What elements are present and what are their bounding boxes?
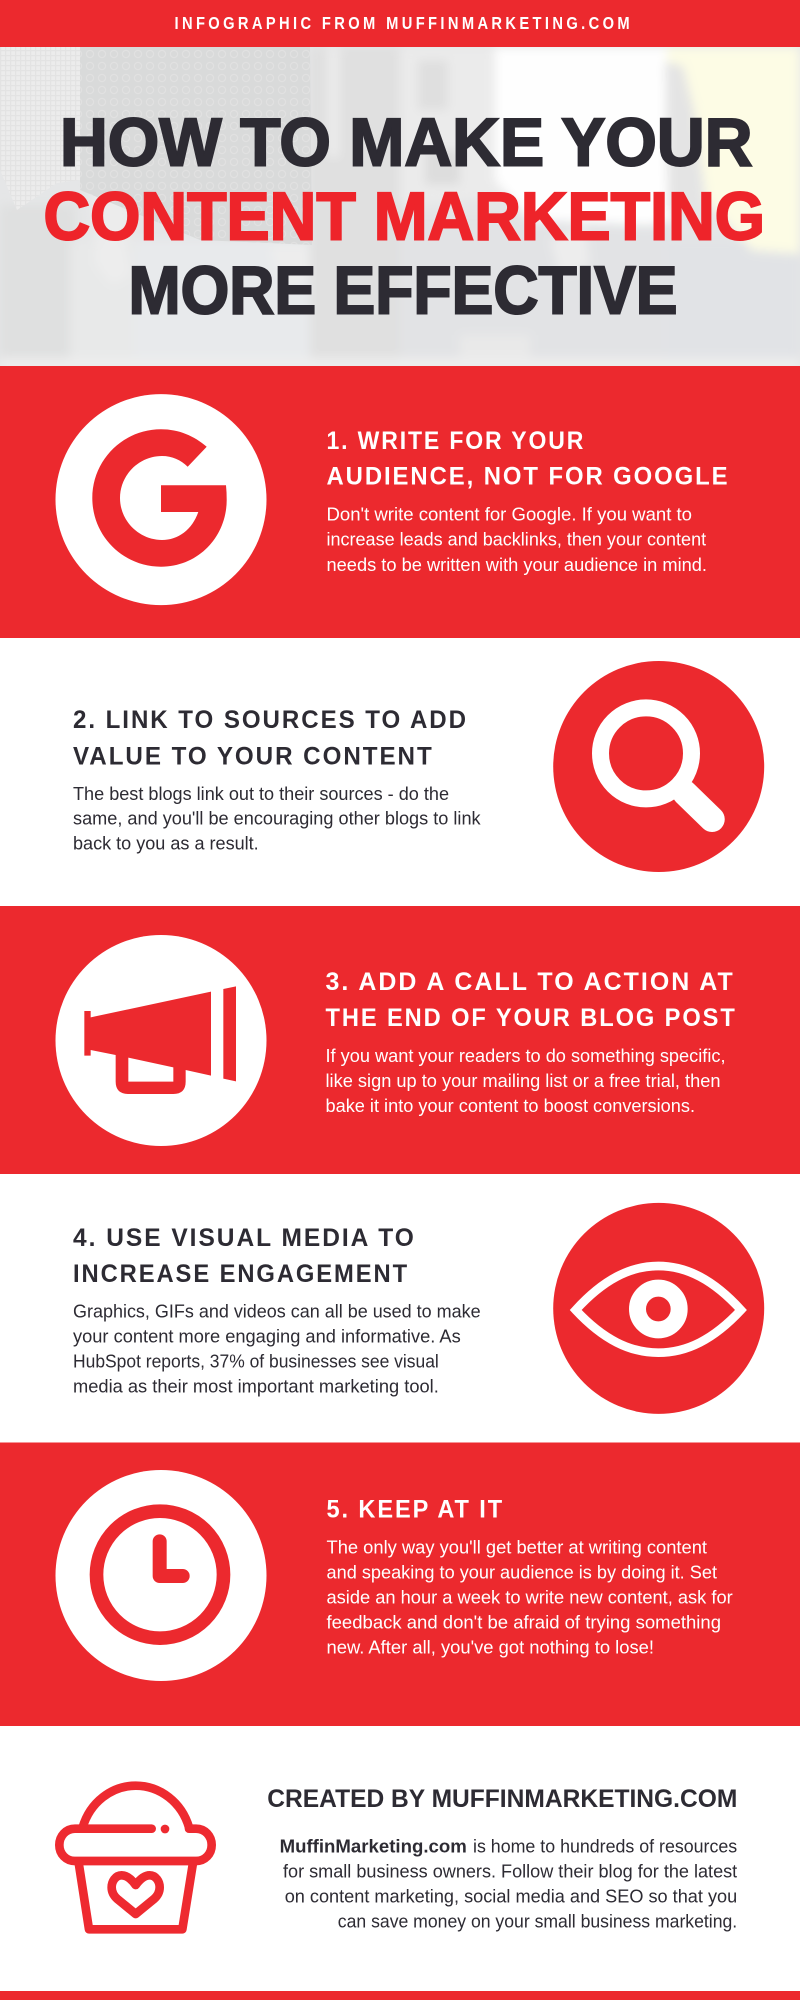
footer body text: for small business owners. Follow their blog for the latest — [283, 1860, 738, 1882]
body text 1 — [326, 504, 707, 575]
heading 3 — [326, 969, 737, 1032]
body text 4: Graphics, GIFs and videos can all be used to make — [73, 1301, 481, 1322]
footer body text: on content marketing, social media and SEO so that you — [285, 1886, 737, 1906]
heading 3: 3. ADD A CALL TO ACTION AT — [326, 969, 735, 996]
heading 5: 5. KEEP AT IT — [326, 1496, 504, 1524]
title: CONTENT MARKETING — [44, 178, 765, 254]
top banner — [0, 0, 800, 47]
body text 3: If you want your readers to do something specific, — [326, 1045, 726, 1066]
body text 5 — [326, 1537, 733, 1658]
panel: 3 add a call to action — [0, 906, 800, 1174]
footer body text: is home to hundreds of resources — [473, 1836, 737, 1856]
heading 2 — [73, 707, 468, 770]
body text 3 — [326, 1045, 726, 1116]
footer heading: CREATED BY MUFFINMARKETING.COM — [267, 1786, 737, 1813]
body text 3: like sign up to your mailing list or a free trial, then — [326, 1070, 720, 1091]
icon: magnifying glass — [553, 661, 764, 872]
hero panel: faded photo background with title — [0, 47, 800, 370]
body text 5: aside an hour a week to write new content, ask for — [326, 1587, 733, 1608]
body text 5: new. After all, you've got nothing to lose! — [326, 1637, 654, 1658]
heading 4: INCREASE ENGAGEMENT — [73, 1261, 409, 1288]
icon: megaphone — [56, 935, 266, 1146]
body text 5: and speaking to your audience is by doing it. Set — [326, 1562, 718, 1583]
body text 1: Don't write content for Google. If you want to — [326, 504, 692, 524]
body text 4: media as their most important marketing tool. — [73, 1375, 439, 1396]
footer body text: MuffinMarketing.com — [280, 1836, 467, 1856]
body text 4: HubSpot reports, 37% of businesses see visual — [73, 1351, 439, 1372]
body text 2 — [73, 783, 481, 854]
panel: 2 link to sources — [0, 638, 800, 906]
icon: google G — [56, 394, 266, 605]
heading 2: VALUE TO YOUR CONTENT — [73, 743, 434, 770]
heading 2: 2. LINK TO SOURCES TO ADD — [73, 707, 468, 734]
heading 1: AUDIENCE, NOT FOR GOOGLE — [326, 464, 730, 491]
body text 1: needs to be written with your audience in mind. — [326, 554, 707, 575]
panel: 5 keep at it — [0, 1442, 800, 1726]
heading 4 — [73, 1225, 416, 1288]
body text 2: back to you as a result. — [73, 833, 259, 854]
title — [44, 104, 765, 328]
panel: 4 use visual media — [0, 1174, 800, 1442]
title: HOW TO MAKE YOUR — [60, 104, 752, 180]
footer body text — [280, 1836, 738, 1932]
panel: 1 write for your audience — [0, 366, 800, 638]
icon: eye — [553, 1203, 764, 1414]
body text 1: increase leads and backlinks, then your content — [326, 529, 707, 550]
bottom red bar — [0, 1991, 800, 2000]
body text 5: The only way you'll get better at writing content — [326, 1537, 708, 1558]
body text 2: same, and you'll be encouraging other blogs to link — [73, 808, 481, 828]
title: MORE EFFECTIVE — [128, 252, 678, 328]
footer body text: can save money on your small business marketing. — [338, 1910, 737, 1932]
heading 3: THE END OF YOUR BLOG POST — [326, 1005, 737, 1032]
icon: clock — [56, 1470, 266, 1681]
banner text: INFOGRAPHIC FROM MUFFINMARKETING.COM — [174, 13, 633, 33]
heading 1 — [326, 428, 730, 491]
body text 3: bake it into your content to boost conversions. — [326, 1095, 695, 1116]
body text 4 — [73, 1301, 481, 1396]
hero photo background — [0, 47, 800, 370]
body text 5: feedback and don't be afraid of trying something — [326, 1612, 721, 1633]
body text 4: your content more engaging and informative. As — [73, 1326, 461, 1346]
heading 4: 4. USE VISUAL MEDIA TO — [73, 1225, 416, 1252]
panel: created by footer — [0, 1726, 800, 1991]
body text 2: The best blogs link out to their sources - do the — [73, 783, 449, 804]
icon: muffin logo — [59, 1786, 212, 1929]
heading 1: 1. WRITE FOR YOUR — [326, 428, 585, 455]
